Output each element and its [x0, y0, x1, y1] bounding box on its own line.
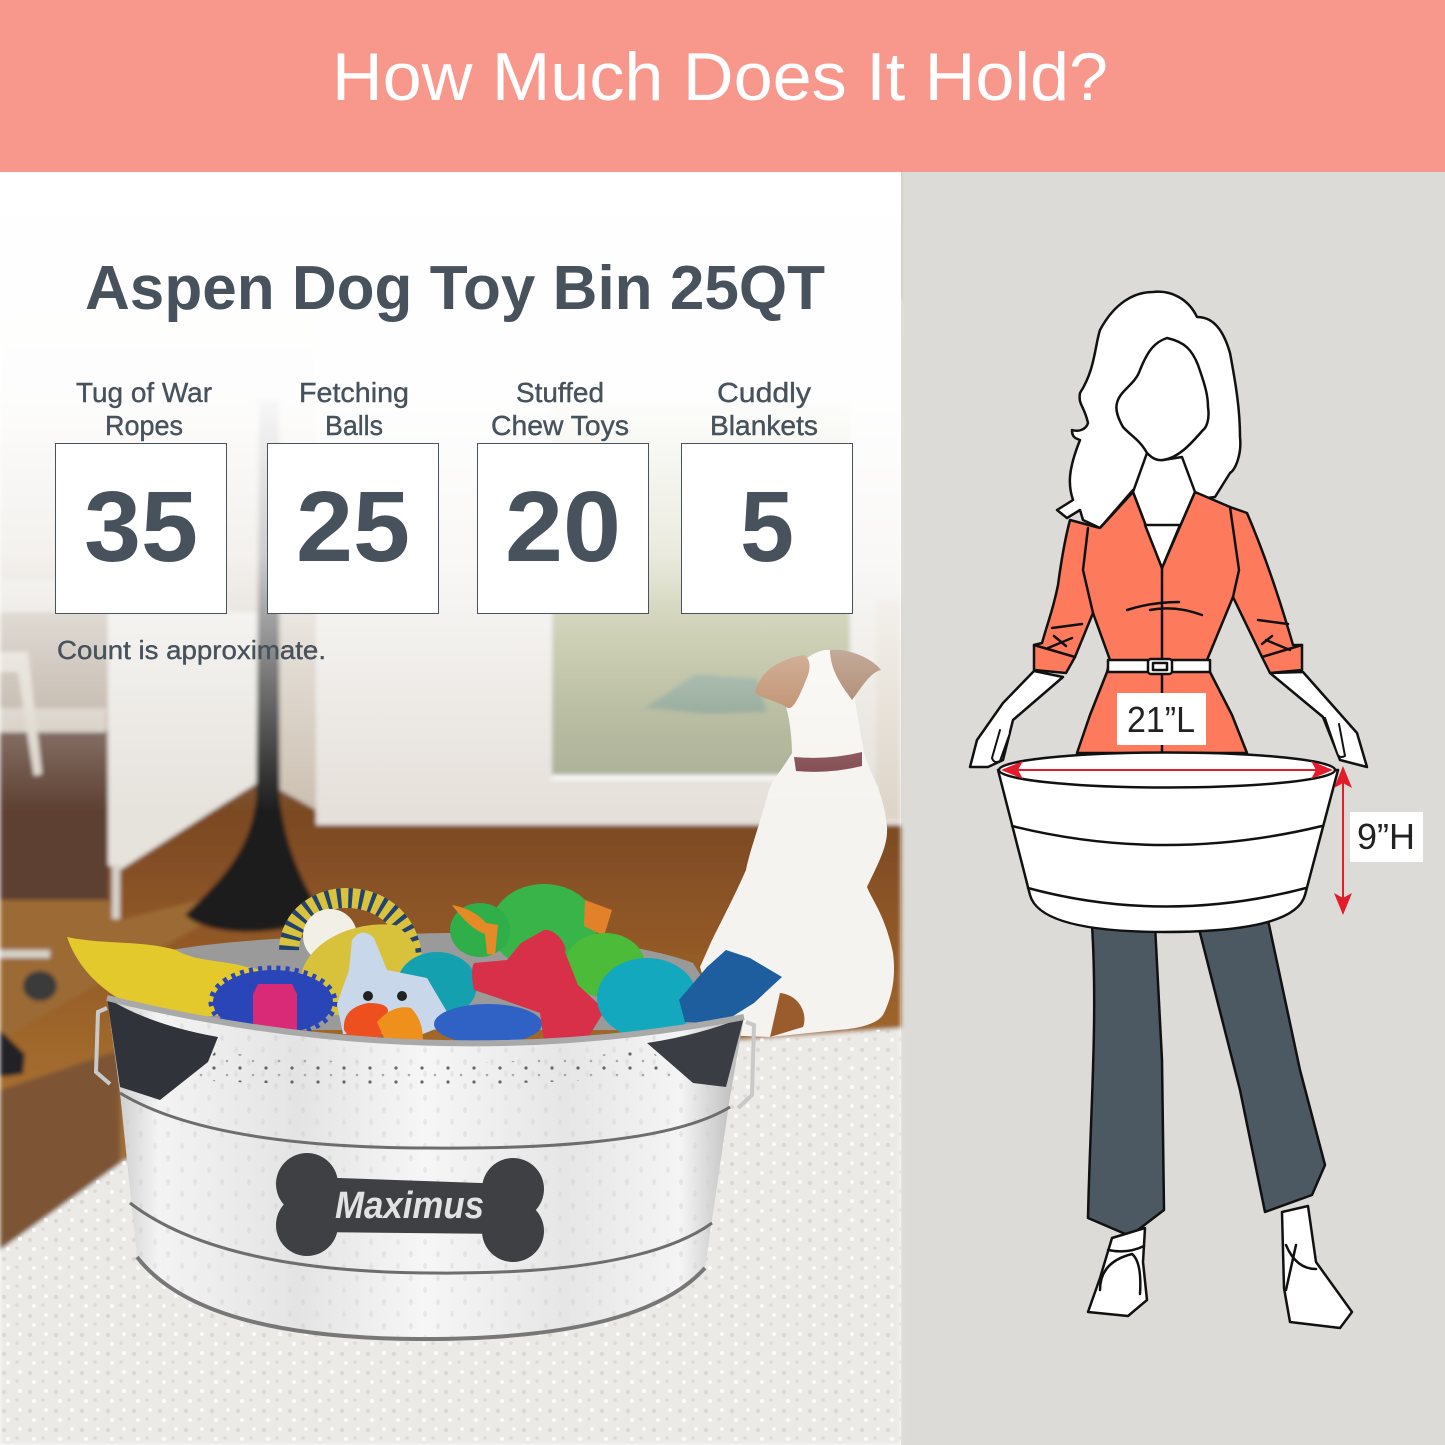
column: stuffed chew toys: Chew Toys [491, 410, 629, 441]
chair base and wheels [0, 950, 50, 958]
bone label: Maximus [335, 1185, 484, 1227]
header band [0, 0, 1445, 172]
arms [970, 671, 1367, 767]
toy: teal ball right [597, 958, 697, 1038]
rug [0, 1028, 901, 1445]
label: length 21"L [1117, 693, 1206, 745]
bin outline [998, 752, 1338, 932]
column: stuffed chew toys [478, 377, 648, 614]
column: cuddly blankets: Blankets [710, 410, 818, 441]
toy: spiky blue ball [213, 970, 333, 1034]
hair [1057, 292, 1240, 528]
belt [1108, 659, 1210, 674]
label: length 21"L: 21”L [1127, 699, 1195, 740]
label: height 9"H: 9”H [1357, 816, 1415, 857]
title: How Much Does It Hold? [332, 39, 1108, 115]
toys [67, 884, 782, 1044]
toy: green ball [491, 884, 597, 970]
arrow: length [1001, 761, 1333, 779]
bin body [96, 998, 754, 1340]
jacket [1034, 492, 1302, 753]
column: stuffed chew toys: Stuffed [516, 377, 604, 408]
column: stuffed chew toys: 20 [505, 471, 621, 583]
column: tug of war ropes: Tug of War [76, 377, 212, 408]
toy: red rubber bone [472, 930, 605, 1041]
face [1116, 338, 1209, 460]
shoes and feet [1088, 1206, 1352, 1328]
column: tug of war ropes [56, 377, 226, 614]
trousers [1088, 920, 1325, 1236]
column: fetching balls: 25 [296, 471, 410, 583]
arrow: height [1334, 766, 1352, 915]
column: cuddly blankets [682, 377, 852, 614]
column: tug of war ropes: Ropes [105, 410, 183, 441]
white cabinet [108, 612, 260, 870]
toy: blue tassel [679, 950, 782, 1023]
column: fetching balls: Balls [325, 410, 383, 441]
photo: room scene with dog and toy bin [0, 172, 901, 1445]
column: tug of war ropes: 35 [84, 471, 198, 583]
label: height 9"H [1350, 812, 1423, 862]
white fade overlay [0, 172, 901, 812]
toy: teal ball left [397, 952, 477, 1018]
background: right panel [901, 172, 1445, 1445]
note: count is approximate: Count is approximate. [57, 635, 326, 665]
toy: plush bunny [337, 932, 453, 1034]
column: fetching balls: Fetching [299, 377, 409, 408]
bin back rim [110, 933, 735, 1030]
floor lamp [185, 400, 322, 932]
room background [0, 172, 901, 1445]
toy: yellow feather rope [67, 937, 290, 1017]
column: cuddly blankets: 5 [740, 471, 794, 583]
dog [700, 650, 894, 1037]
toy: striped rope ring [289, 898, 412, 958]
toy: blue rubber knot [434, 1004, 542, 1044]
bone label [276, 1153, 544, 1262]
column: fetching balls [268, 377, 438, 614]
product heading: Aspen Dog Toy Bin 25QT [85, 254, 825, 323]
figure: woman holding bin [970, 292, 1367, 1328]
neck [1133, 453, 1195, 568]
column: cuddly blankets: Cuddly [717, 377, 811, 408]
